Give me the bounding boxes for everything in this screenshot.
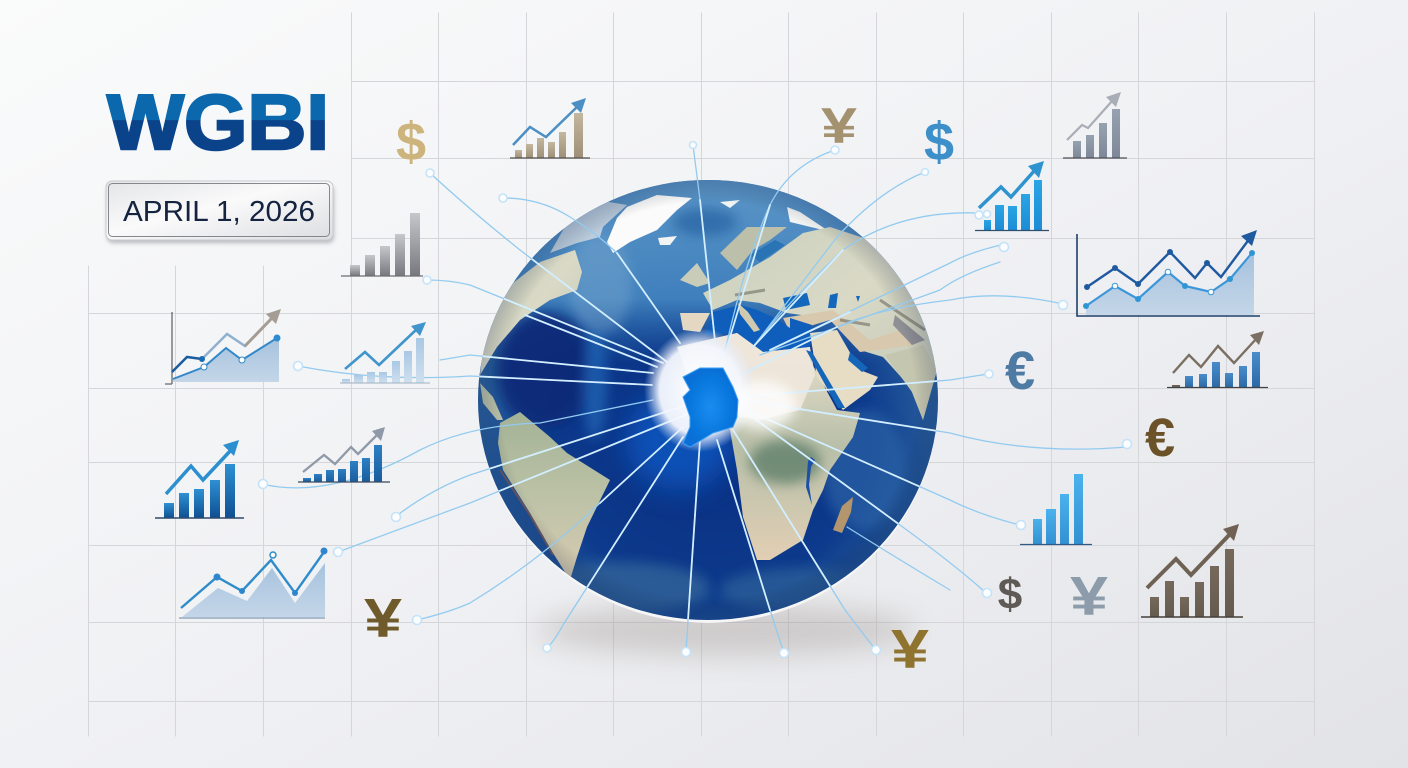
chart: top right grey bars — [1063, 92, 1127, 158]
land: Turkey and Persia — [783, 310, 915, 352]
currency: gold dollar: $ — [396, 112, 426, 172]
land: North America — [480, 250, 582, 375]
ocean — [470, 170, 950, 630]
chart: grey bars — [341, 213, 423, 276]
land: Arctic islands — [550, 200, 627, 253]
chart: large right line and area — [1077, 230, 1260, 316]
currency: slate euro: € — [1005, 341, 1035, 401]
chart: top tan bars — [510, 98, 590, 158]
land: India — [885, 345, 937, 420]
land: northern Africa glow — [677, 333, 815, 420]
chart: lower left line and area — [179, 548, 328, 618]
hub glow — [644, 328, 796, 452]
date text: APRIL 1, 2026 — [123, 196, 315, 228]
hub core — [683, 368, 738, 447]
currency: brown euro: € — [1145, 408, 1175, 468]
chart: left blue bars with arrow — [155, 440, 244, 518]
chart: brown bars with arrow — [1141, 524, 1243, 617]
chart: left line and area — [165, 309, 281, 384]
great lakes — [806, 457, 815, 505]
land: British Isles — [680, 263, 710, 287]
globe shadow — [535, 604, 915, 656]
land: South America — [498, 412, 610, 580]
chart: blue bars with arrow — [975, 161, 1049, 230]
Himalaya — [893, 315, 925, 345]
land: Central America — [480, 383, 503, 420]
title: WGBI: WGBI — [107, 78, 329, 166]
currency: gold yen: ¥ — [891, 618, 930, 680]
currency: slate yen: ¥ — [1070, 565, 1109, 627]
currency: grey dollar: $ — [998, 570, 1022, 619]
Andes ridge — [500, 470, 553, 555]
land: Scandinavia — [720, 227, 787, 270]
connection node dots — [258, 142, 1132, 658]
bright rays over globe — [470, 200, 950, 625]
land: Italy — [738, 303, 760, 332]
currency: brown yen: ¥ — [364, 587, 403, 649]
land: Greenland — [607, 195, 692, 253]
currency: tan yen: ¥ — [821, 98, 857, 154]
sea: Baltic — [750, 240, 785, 262]
chart: right blue bars with brown arrow — [1167, 331, 1268, 388]
date plate — [106, 181, 334, 243]
sea: Black and Caspian — [783, 293, 860, 310]
land: Arabia — [810, 330, 878, 410]
land: Madagascar — [833, 497, 853, 533]
sea: Gulf and Red Sea — [806, 350, 868, 408]
mountain ranges — [735, 290, 925, 330]
connection lines — [262, 145, 1127, 653]
land: Africa — [677, 333, 860, 560]
land: Iberia — [680, 313, 710, 332]
land: Iceland and Svalbard — [658, 200, 830, 245]
chart: small light bars with arrow — [340, 322, 430, 383]
chart: navy bars with grey arrow — [298, 427, 390, 482]
land: Eurasia — [703, 227, 937, 420]
chart: pale blue bars — [1020, 474, 1092, 544]
land: central Africa green — [749, 440, 821, 484]
globe — [470, 170, 950, 630]
globe rim — [478, 180, 938, 620]
sea: Mediterranean — [705, 305, 812, 352]
currency: blue dollar: $ — [924, 112, 954, 172]
